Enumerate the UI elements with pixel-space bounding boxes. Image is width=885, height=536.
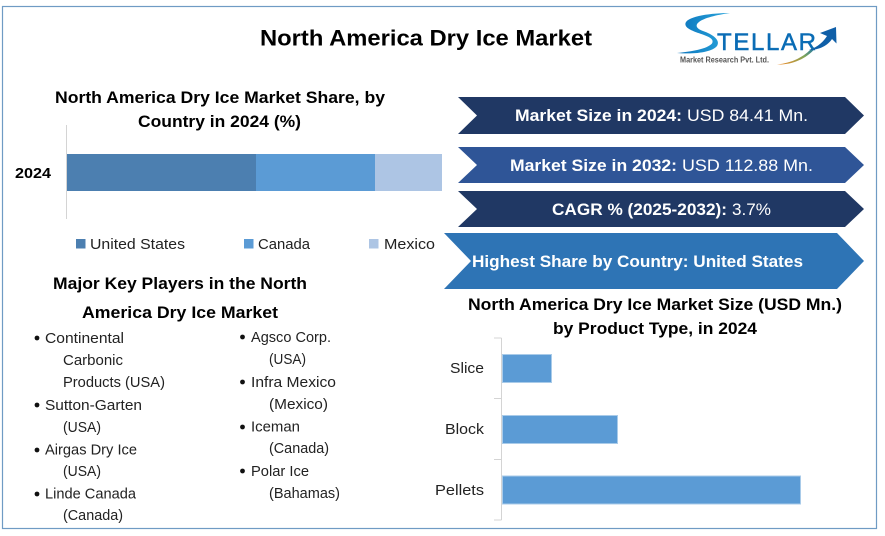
left chart heading [55,89,386,131]
arrow banner: market size 2032: USD 112.88 Mn. [682,157,813,175]
key players list: right column [240,330,340,502]
stacked bar chart: share by country [15,125,442,219]
bar segment: United States [67,154,256,191]
arrow banner: market size 2024 [458,97,864,134]
legend: Mexico [384,237,435,253]
legend [76,237,435,253]
arrow banner: CAGR: 3.7% [732,201,771,219]
title: North America Dry Ice Market [260,26,593,50]
key players list: right column: (USA) [269,352,306,368]
arrow banner: highest share [444,233,864,289]
key players list: left column: Carbonic [63,353,123,369]
arrow banner: market size 2032 [458,147,864,183]
legend: Canada [258,237,311,253]
key players list: left column: Linde Canada [45,486,137,502]
logo tagline: Market Research Pvt. Ltd. [680,56,769,64]
key players list: left column: (USA) [63,420,101,436]
legend: United States [90,237,185,253]
key players heading: America Dry Ice Market [82,304,279,322]
bar: Block [445,416,618,444]
right chart heading: by Product Type, in 2024 [553,320,758,338]
bar: Slice: Slice [450,361,484,377]
left chart heading: North America Dry Ice Market Share, by [55,89,386,107]
key players heading: Major Key Players in the North [53,275,307,293]
bar segment: Canada [256,154,375,191]
key players list: left column: (Canada) [63,508,123,524]
right chart heading [468,296,842,338]
key players list: right column: (Canada) [269,441,329,457]
arrow banner: CAGR: CAGR % (2025-2032): [552,201,727,219]
bar segment: Mexico [375,154,442,191]
right chart heading: North America Dry Ice Market Size (USD Mn.) [468,296,842,314]
arrow banner: market size 2032: Market Size in 2032: [510,157,677,175]
bar: Pellets: Pellets [435,483,484,499]
bar: Block: Block [445,422,485,438]
key players list: right column: Infra Mexico [251,375,336,391]
arrow banner: market size 2024: USD 84.41 Mn. [687,107,808,125]
logo swoosh S [677,13,730,53]
left chart heading: Country in 2024 (%) [138,113,301,131]
logo: Stellar Market Research [677,13,836,65]
axis label 2024: 2024 [15,166,51,182]
key players list: left column: Products (USA) [63,375,165,391]
key players list: left column: Sutton-Garten [45,398,142,414]
key players heading [53,275,307,322]
bar: Slice [450,354,552,382]
logo orange swoosh [777,47,815,65]
key players list: right column: Agsco Corp. [251,330,331,346]
bar: Pellets [435,476,800,504]
arrow banner: highest share: Highest Share by Country: United States [472,253,803,271]
logo wordmark: TELLAR [717,29,816,56]
arrow banner: CAGR [458,191,864,227]
key players list: right column: (Bahamas) [269,486,340,502]
key players list: right column: Polar Ice [251,464,309,480]
bar chart: size by product type [435,338,800,520]
key players list: right column: (Mexico) [269,397,328,413]
key players list: right column: Iceman [251,420,300,436]
logo arrow [809,27,836,50]
key players list: left column: Continental [45,331,124,347]
arrow banner: market size 2024: Market Size in 2024: [515,107,682,125]
key players list: left column: Airgas Dry Ice [45,442,137,458]
key players list: left column: (USA) [63,464,101,480]
key players list: left column [35,331,165,524]
